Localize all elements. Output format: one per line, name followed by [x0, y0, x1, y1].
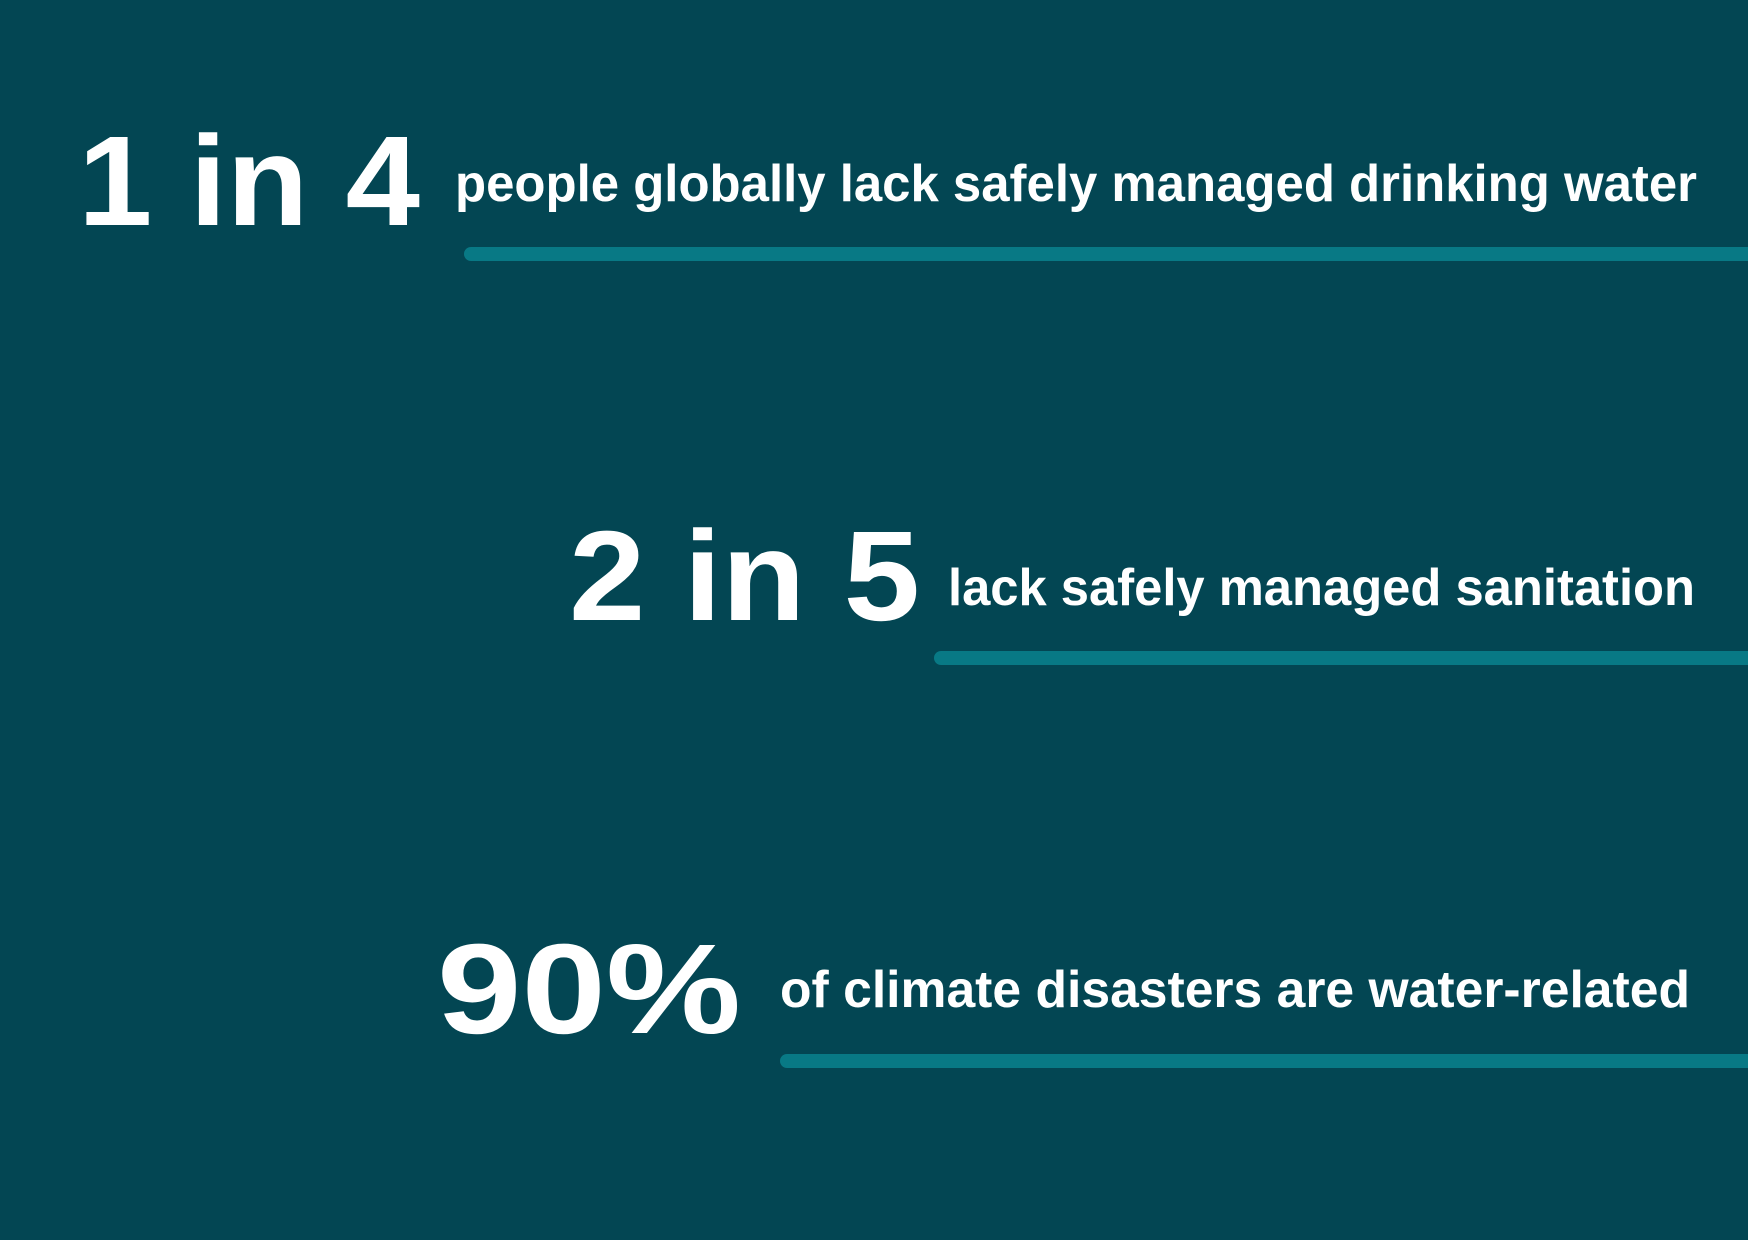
- stat 2: sanitation: [569, 505, 1748, 665]
- stat 3: climate disasters: [437, 918, 1748, 1068]
- underline bar 1: [464, 247, 1748, 261]
- underline bar 3: [780, 1054, 1748, 1068]
- description: sanitation: lack safely managed sanitation: [948, 559, 1695, 617]
- description: climate disasters: of climate disasters are water-related: [780, 961, 1690, 1019]
- underline bar 2: [934, 651, 1748, 665]
- big number: 90%: 90%: [437, 918, 741, 1061]
- big number: 2 in 5: 2 in 5: [569, 505, 920, 648]
- description: drinking water: people globally lack safely managed drinking water: [455, 155, 1697, 213]
- big number: 1 in 4: 1 in 4: [78, 110, 420, 253]
- stat 1: drinking water: [78, 110, 1748, 261]
